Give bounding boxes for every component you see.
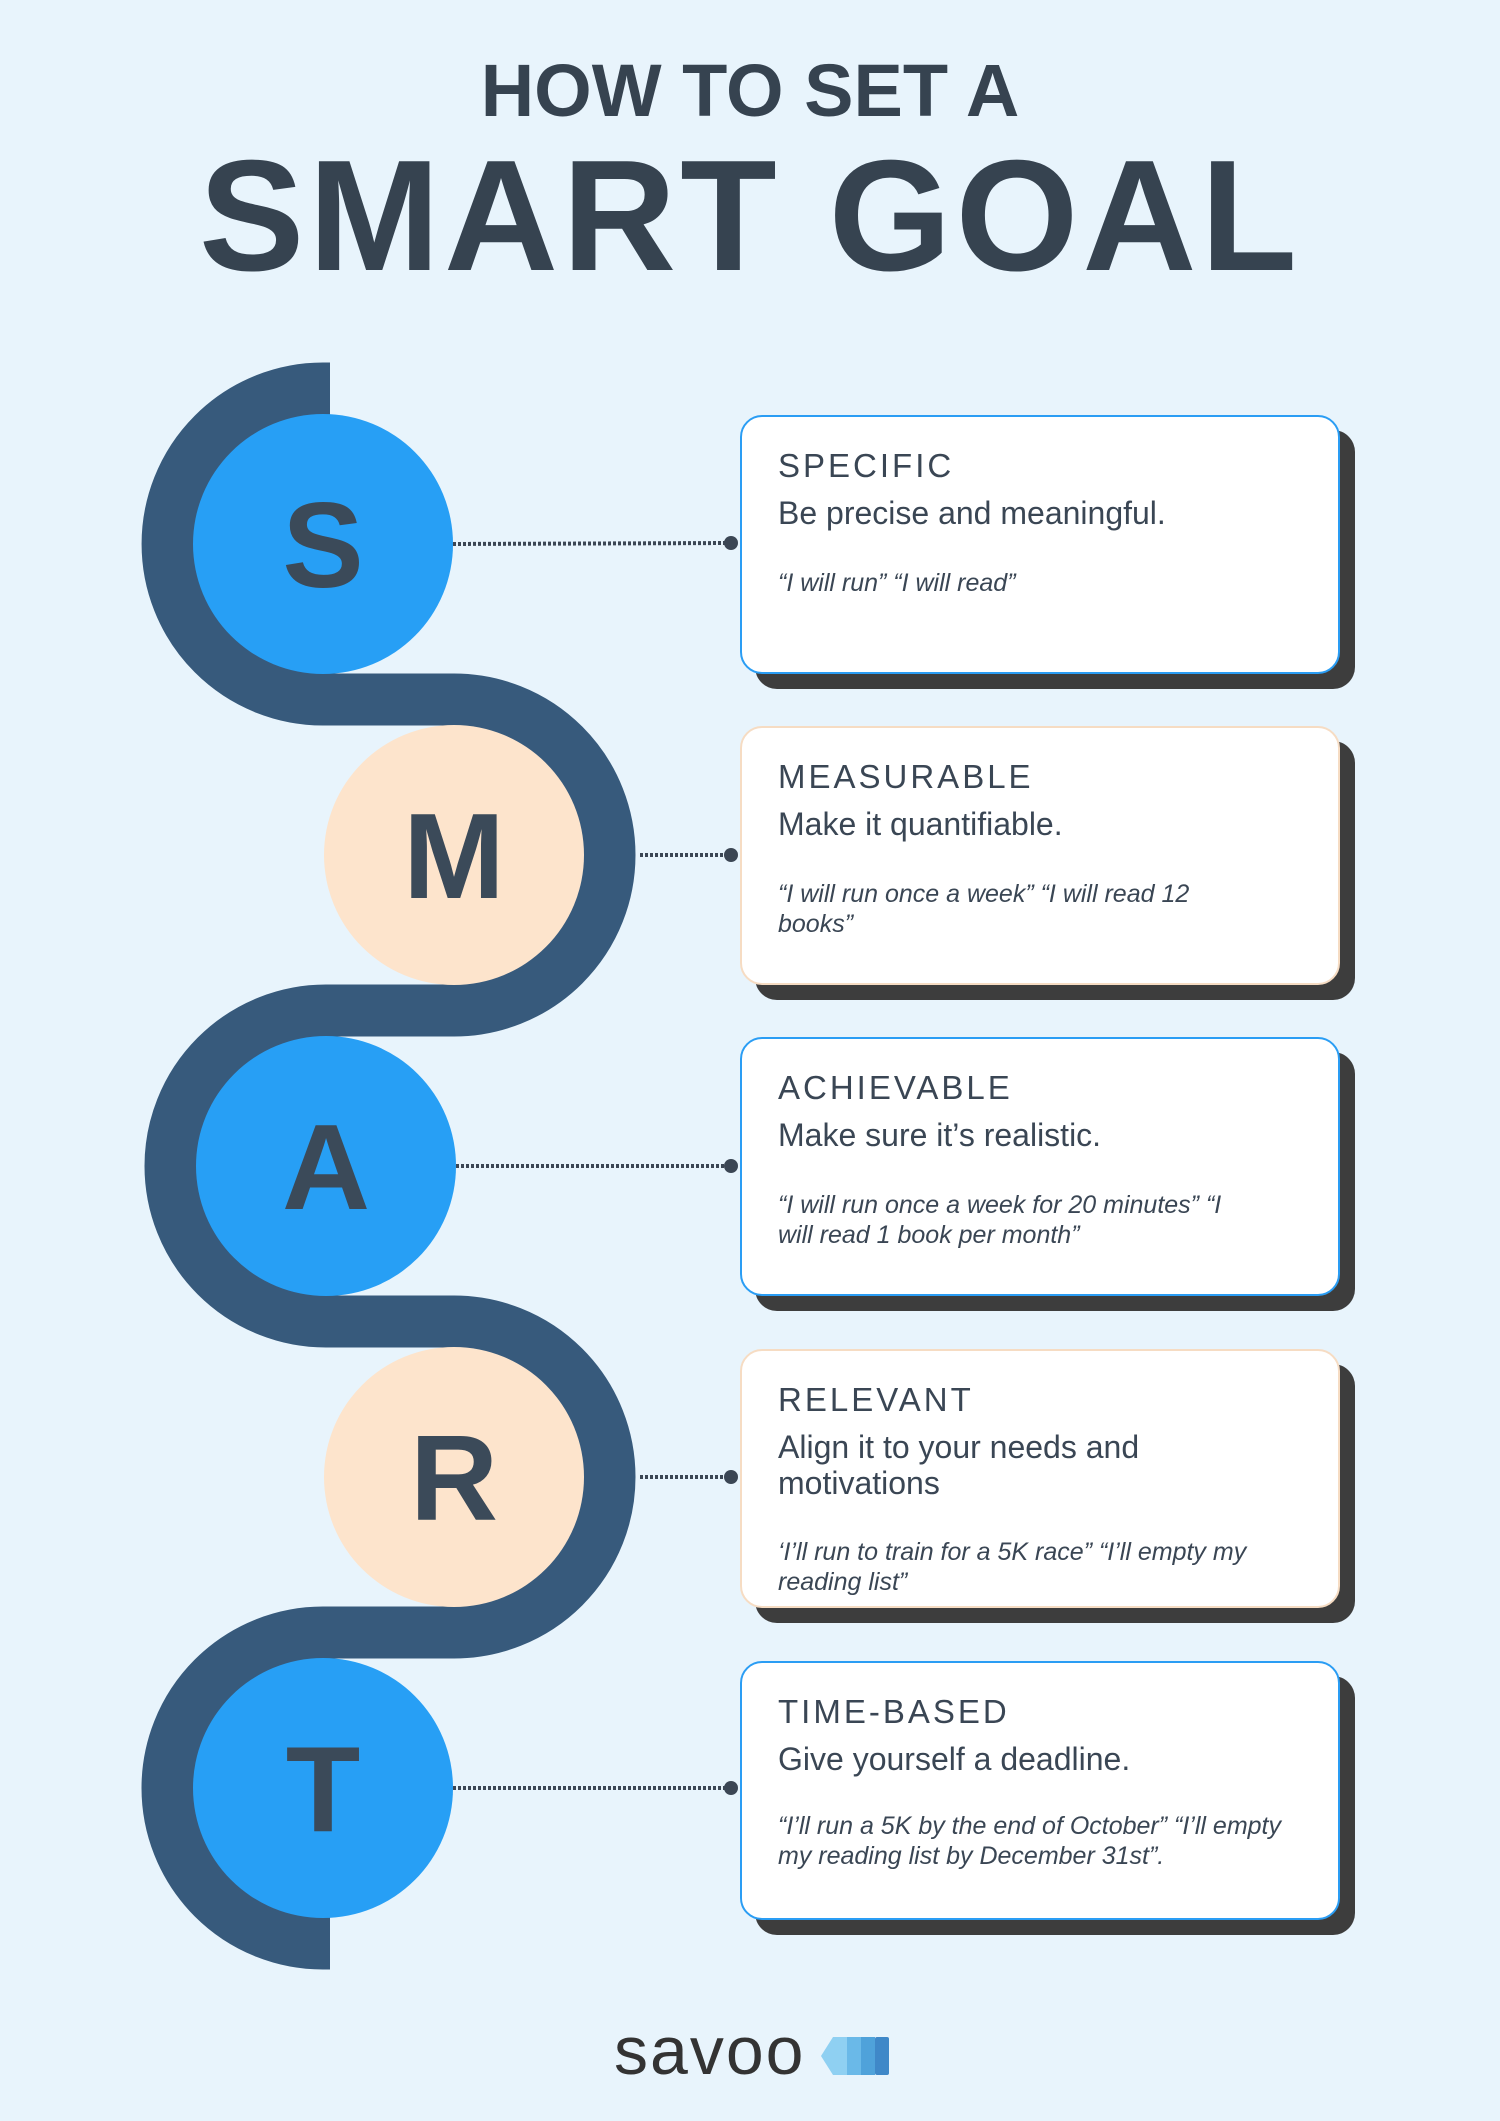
circle T	[193, 1658, 453, 1918]
circle R: R	[410, 1410, 498, 1546]
card: time-based	[740, 1661, 1355, 1935]
card: measurable: “I will run once a week” “I will read 12 books”	[778, 880, 1189, 938]
card: relevant: Align it to your needs and motivations	[778, 1429, 1139, 1501]
circle M: M	[403, 788, 505, 924]
connectors	[453, 543, 730, 1788]
snake band	[168, 388, 610, 1944]
card: time-based: TIME-BASED	[778, 1693, 1010, 1730]
card: achievable	[740, 1037, 1355, 1311]
icon: tag	[821, 2037, 889, 2075]
card: time-based: Give yourself a deadline.	[778, 1741, 1130, 1777]
card: measurable	[740, 726, 1355, 1000]
circle T: T	[286, 1721, 360, 1857]
card: specific: Be precise and meaningful.	[778, 495, 1166, 531]
circle A: A	[282, 1099, 370, 1235]
card: time-based: “I’ll run a 5K by the end of October” “I’ll empty my reading list by December 31st”.	[778, 1812, 1281, 1870]
logo: savoo: savoo	[614, 2013, 805, 2089]
title: smart goal: SMART GOAL	[199, 128, 1301, 304]
card: specific	[740, 415, 1355, 689]
card: measurable: MEASURABLE	[778, 758, 1034, 795]
card: achievable: “I will run once a week for 20 minutes” “I will read 1 book per month”	[778, 1191, 1221, 1249]
card: achievable: ACHIEVABLE	[778, 1069, 1013, 1106]
logo: savoo	[614, 2013, 889, 2089]
card: achievable: Make sure it’s realistic.	[778, 1117, 1101, 1153]
circle M	[324, 725, 584, 985]
circle S: S	[282, 477, 364, 613]
card: relevant: ‘I’ll run to train for a 5K race” “I’ll empty my reading list”	[778, 1538, 1246, 1596]
card: specific: “I will run” “I will read”	[778, 569, 1016, 597]
card: relevant: RELEVANT	[778, 1381, 974, 1418]
card: specific: SPECIFIC	[778, 447, 954, 484]
circle R	[324, 1347, 584, 1607]
card: relevant	[740, 1349, 1355, 1623]
circle S	[193, 414, 453, 674]
card: measurable: Make it quantifiable.	[778, 806, 1063, 842]
circle A	[196, 1036, 456, 1296]
title: how to set a: HOW TO SET A	[481, 49, 1019, 132]
